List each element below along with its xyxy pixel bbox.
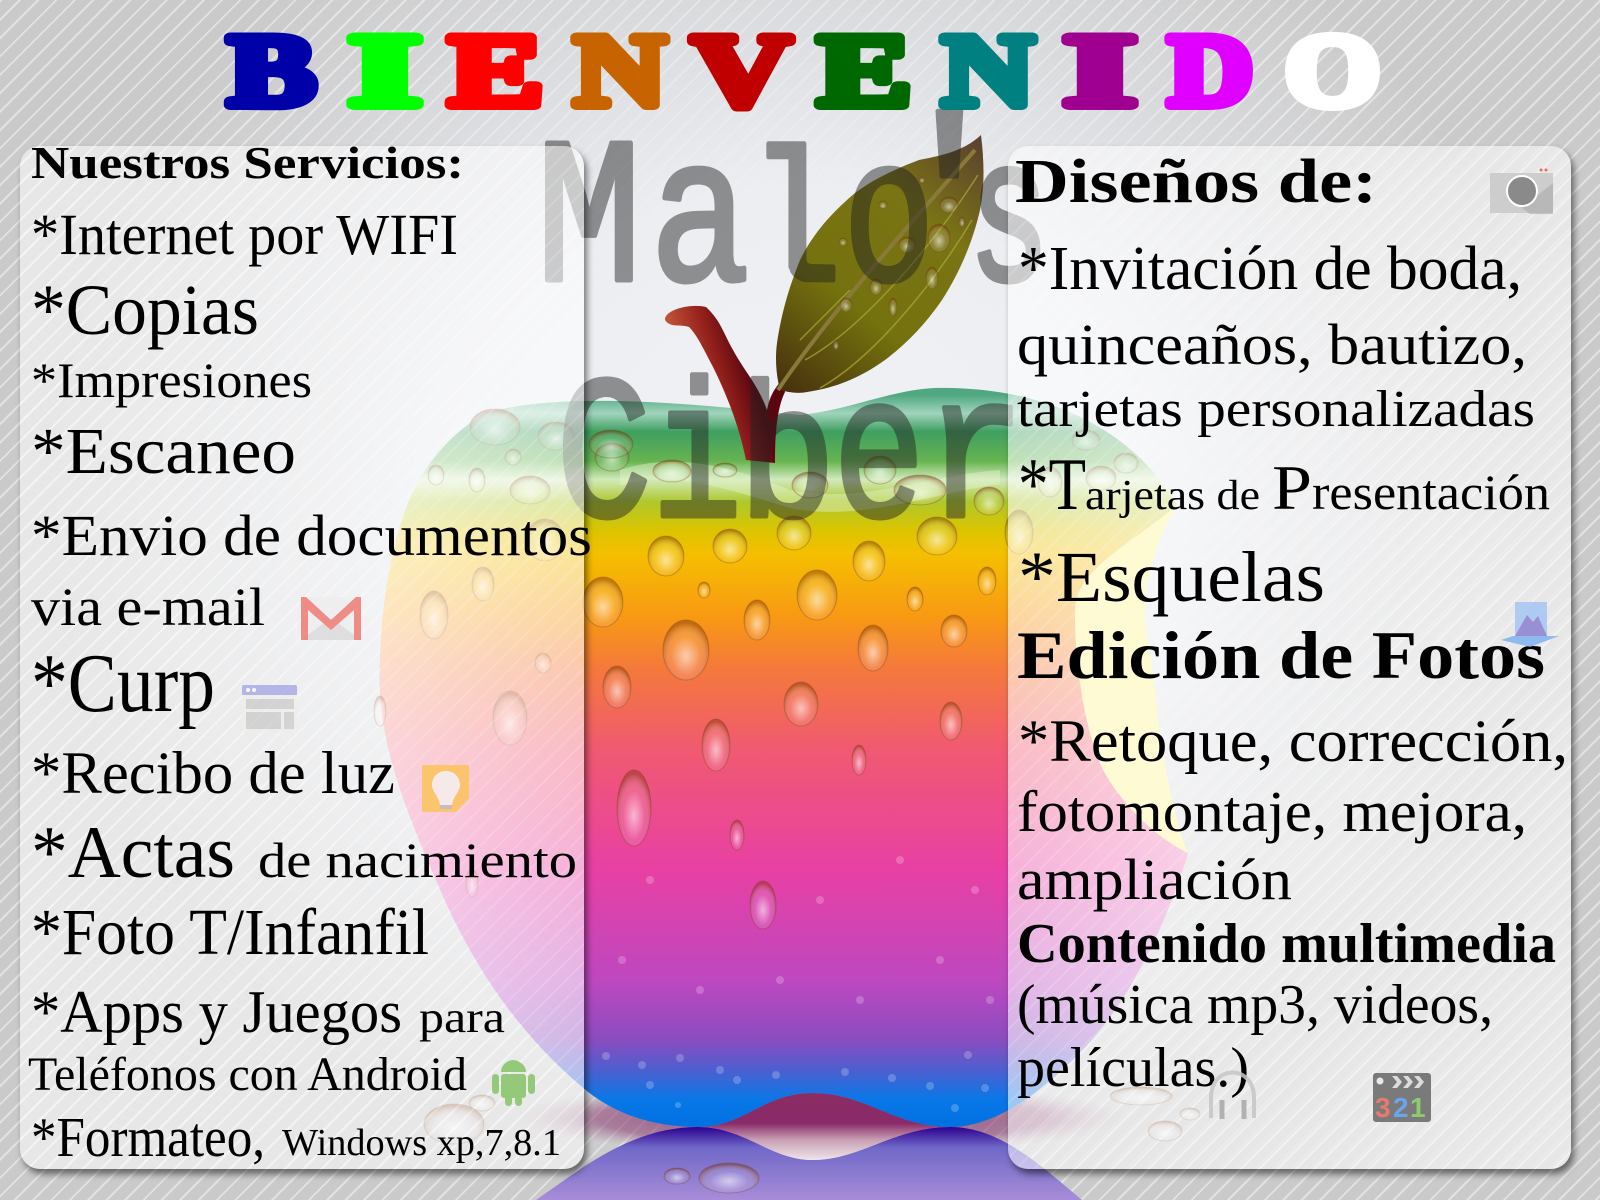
list: disenos de: resentación	[1312, 464, 1550, 520]
icon: clapperboard 321	[1373, 1073, 1431, 1123]
list: nuestros servicios: *Internet por WIFI	[31, 202, 458, 267]
leaf veins	[778, 150, 978, 390]
list: disenos de: *T	[1018, 444, 1086, 526]
title: BIENVENIDO: N	[574, 14, 666, 128]
watermark: Malo's Ciber: o	[843, 108, 935, 343]
watermark: Malo's Ciber: l	[748, 124, 842, 337]
list: nuestros servicios: de nacimiento	[258, 832, 577, 888]
list: nuestros servicios: Teléfonos con Android	[28, 1048, 467, 1101]
list: disenos de: ampliación	[1017, 847, 1292, 912]
apple stem	[665, 306, 785, 463]
icon: gmail	[301, 597, 361, 640]
icon: picture on laptop	[1501, 602, 1559, 647]
list: nuestros servicios: *Impresiones	[31, 352, 312, 408]
list: nuestros servicios: via e-mail	[31, 577, 265, 637]
water drops	[374, 409, 1200, 1193]
title: BIENVENIDO: V	[692, 14, 791, 128]
list: nuestros servicios: *Apps y Juegos	[31, 979, 402, 1045]
icon: light bulb	[422, 765, 469, 812]
list: disenos de: arjetas de	[1085, 473, 1260, 519]
apple reflection	[536, 1127, 1082, 1200]
apple bite flesh	[1075, 505, 1188, 853]
apple top highlight band	[620, 462, 1000, 512]
icon: clapperboard 321: 2	[1393, 1092, 1409, 1123]
list: nuestros servicios: *Escaneo	[31, 415, 296, 488]
apple shadow	[510, 1082, 1130, 1154]
list: disenos de: *Retoque, corrección,	[1018, 708, 1568, 774]
list: disenos de	[1015, 148, 1568, 1099]
list: nuestros servicios: para	[419, 993, 505, 1042]
panel: servicios	[20, 146, 584, 1169]
list: disenos de: quinceaños, bautizo,	[1017, 312, 1527, 377]
watermark: Malo's Ciber	[536, 90, 1050, 578]
apple body	[380, 388, 1188, 1127]
panel: disenos	[1008, 146, 1571, 1169]
apple edge fade	[370, 385, 1200, 1130]
title: BIENVENIDO: E	[818, 14, 911, 128]
leaf	[776, 135, 984, 393]
list: nuestros servicios	[28, 137, 592, 1169]
icon: android	[492, 1060, 535, 1106]
list: nuestros servicios: *Envio de documentos	[31, 503, 592, 568]
list: disenos de: Diseños de:	[1015, 148, 1377, 216]
list: nuestros servicios: Windows xp,7,8.1	[282, 1122, 561, 1164]
list: nuestros servicios: *Recibo de luz	[31, 740, 395, 806]
title: BIENVENIDO: B	[228, 14, 316, 128]
watermark: Malo's Ciber: b	[738, 359, 836, 574]
list: nuestros servicios: *Copias	[31, 270, 259, 350]
title: BIENVENIDO: I	[349, 14, 421, 128]
icon: clapperboard 321: 1	[1410, 1092, 1426, 1123]
title: BIENVENIDO: I	[1064, 14, 1136, 128]
list: disenos de: tarjetas personalizadas	[1017, 381, 1535, 438]
watermark: Malo's Ciber: s	[968, 108, 1050, 343]
watermark: Malo's Ciber: e	[833, 345, 925, 578]
list: disenos de: *Invitación de boda,	[1018, 235, 1522, 303]
watermark: Malo's Ciber: M	[536, 108, 642, 343]
list: nuestros servicios: Nuestros Servicios:	[31, 137, 464, 188]
list: nuestros servicios: *Formateo,	[31, 1107, 265, 1169]
list: disenos de: fotomontaje, mejora,	[1017, 779, 1527, 844]
apple speckles	[602, 856, 994, 1112]
title: BIENVENIDO: D	[1168, 14, 1253, 128]
list: disenos de: películas.)	[1017, 1037, 1249, 1099]
list: disenos de: P	[1272, 452, 1312, 523]
icon: headphones	[1211, 1072, 1254, 1119]
list: nuestros servicios: *Foto T/Infanfil	[31, 896, 429, 969]
watermark: Malo's Ciber: '	[887, 90, 1012, 325]
list: disenos de: *Esquelas	[1018, 537, 1325, 617]
title: BIENVENIDO: O	[1285, 14, 1380, 128]
leaf drops	[833, 177, 965, 350]
apple dimple shadow	[698, 1093, 950, 1160]
watermark: Malo's Ciber: a	[650, 108, 750, 343]
illustration: rainbow apple with watermark	[374, 108, 1200, 1200]
watermark: Malo's Ciber: i	[652, 354, 742, 575]
title: BIENVENIDO: N	[942, 14, 1034, 128]
watermark: Malo's Ciber: C	[556, 345, 652, 578]
list: disenos de: Contenido multimedia	[1017, 913, 1556, 975]
list: nuestros servicios: *Actas	[31, 812, 235, 894]
list: nuestros servicios: *Curp	[31, 637, 215, 730]
icon: clapperboard 321: 3	[1375, 1092, 1391, 1123]
list: disenos de: Edición de Fotos	[1017, 617, 1545, 693]
icon: browser window	[242, 685, 297, 733]
list: disenos de: (música mp3, videos,	[1017, 974, 1493, 1036]
icon: camera	[1490, 168, 1553, 214]
watermark: Malo's Ciber: r	[924, 345, 1026, 578]
title: BIENVENIDO: E	[449, 14, 543, 128]
title: BIENVENIDO	[228, 14, 1380, 128]
